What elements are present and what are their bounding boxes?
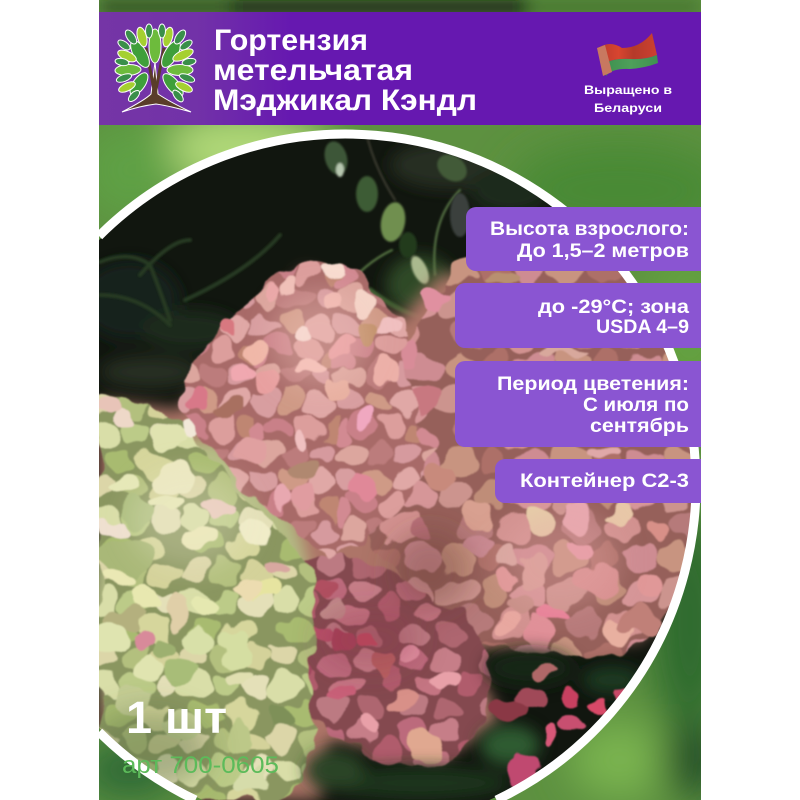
panel: container [495, 459, 701, 503]
circular hydrangea photo [80, 130, 701, 800]
title: метельчатая [213, 54, 413, 87]
title: Мэджикал Кэндл [213, 84, 477, 117]
origin label [584, 86, 672, 114]
dark foliage background [80, 139, 550, 388]
quantity label: 1 шт [126, 692, 227, 743]
panel: flowering period [455, 361, 701, 447]
article number: арт 700-0605 [122, 752, 279, 779]
panel: flowering period: сентябрь [590, 416, 689, 437]
panel: height [466, 207, 701, 271]
pink flower panicle, centre-left [178, 262, 430, 560]
white ring around photo [99, 134, 696, 800]
origin label: Выращено в [584, 83, 672, 97]
panel: hardiness [455, 283, 701, 348]
logo: tree [114, 24, 197, 112]
flowers [95, 262, 700, 800]
panel: hardiness: до -29°C; зона [538, 297, 689, 318]
panel: flowering period: Период цветения: [497, 374, 689, 395]
panel: flowering period: С июля по [583, 395, 689, 416]
deep pink flower panicle, lower centre [280, 558, 492, 764]
deep pink flower panicle, lower right [492, 666, 631, 784]
icon: Belarus flag [597, 33, 658, 76]
flower mass underpainting [90, 270, 700, 800]
pale green flower panicle, left [95, 392, 316, 800]
large salmon flower panicle, right [368, 256, 691, 660]
title: Гортензия [214, 24, 368, 57]
panel: container: Контейнер С2-3 [520, 471, 689, 492]
panel: height: Высота взрослого: [490, 219, 689, 240]
title [213, 24, 477, 117]
panel: height: До 1,5–2 метров [517, 241, 689, 262]
dark green foliage, bottom [305, 650, 642, 799]
header band [99, 12, 701, 125]
soft light and shade over the flowers [90, 290, 620, 790]
origin label: Беларуси [594, 101, 662, 115]
panel: hardiness: USDA 4–9 [596, 317, 689, 338]
